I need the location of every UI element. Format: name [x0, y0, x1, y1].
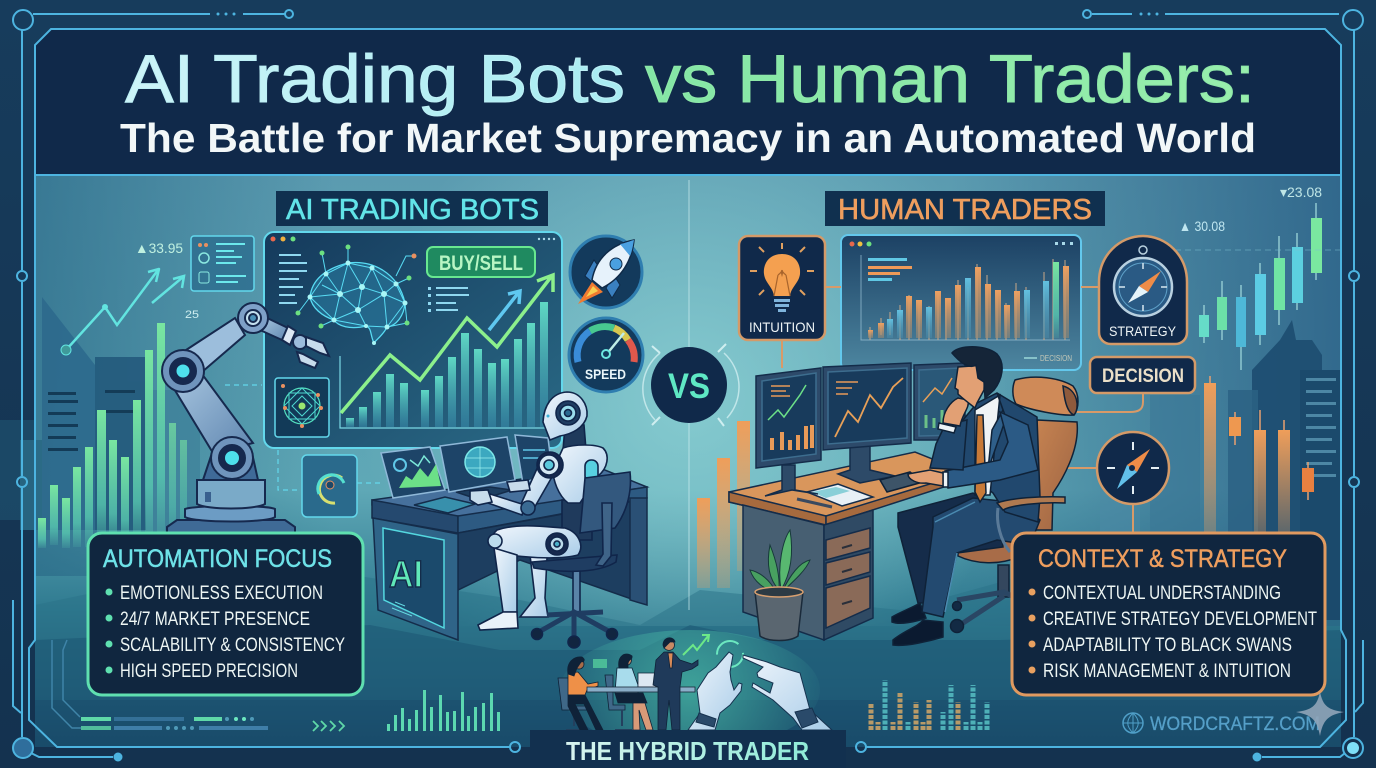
orange bars center-right [697, 421, 750, 588]
head [543, 392, 587, 440]
decision box [1090, 357, 1195, 393]
front shoe [893, 620, 943, 645]
people at table [558, 638, 698, 730]
forearm on desk [945, 412, 1038, 488]
heading: the hybrid trader [530, 730, 846, 768]
human monitors [756, 363, 965, 496]
back leg [898, 493, 1003, 603]
blue arrow [489, 291, 520, 330]
connector lines right [782, 287, 1143, 532]
icon panel below monitor [225, 385, 382, 517]
bullet list [106, 583, 345, 682]
robot arm [162, 303, 329, 546]
torso and neck [563, 425, 586, 450]
torso [963, 393, 1040, 522]
bar chart: left background [38, 323, 187, 548]
city skyline right [1100, 320, 1341, 620]
icon: strategy compass [1099, 236, 1187, 344]
panel title: AUTOMATION FOCUS [103, 545, 332, 573]
price label 33.95: ▲33.95 [135, 240, 183, 256]
bullet list: 24/7 MARKET PRESENCE [120, 609, 310, 630]
desk drawers [826, 528, 870, 628]
keyboard [880, 472, 923, 492]
mini bar chart: bottom left [387, 690, 500, 731]
human trader [880, 347, 1078, 645]
AI desk panel: AI [389, 554, 423, 596]
robot chair [532, 570, 618, 648]
green trend arrow [341, 275, 553, 413]
price label 30.08: ▲ 30.08 [1179, 218, 1225, 234]
heading: the hybrid trader: THE HYBRID TRADER [566, 736, 809, 766]
icon: speed gauge [569, 318, 643, 392]
title line two: The Battle for Market Supremacy in an Automated World [120, 115, 1256, 161]
small trend arrow [683, 635, 709, 655]
target pulse [717, 641, 743, 667]
bullet list: RISK MANAGEMENT & INTUITION [1043, 661, 1291, 682]
scene background [35, 176, 1341, 747]
icon: rocket [570, 236, 642, 308]
panel title: CONTEXT & STRATEGY [1038, 545, 1287, 573]
bullet list: SCALABILITY & CONSISTENCY [120, 635, 345, 656]
decorative data strips bottom left [52, 640, 344, 731]
mini dot chart: bottom right [871, 680, 987, 730]
BUY/SELL button [427, 247, 535, 277]
candlestick chart: right background [1175, 203, 1341, 543]
panel: context and strategy [1012, 533, 1325, 695]
thigh [492, 526, 581, 558]
far leg [520, 555, 548, 617]
watermark [1123, 692, 1344, 736]
front leg [922, 498, 1040, 617]
near lower leg [494, 548, 517, 612]
panel candles [868, 259, 1069, 340]
bullet list: EMOTIONLESS EXECUTION [120, 583, 323, 604]
bullet list: ADAPTABILITY TO BLACK SWANS [1043, 635, 1292, 656]
bullet list [1028, 583, 1317, 682]
title line one part one: AI Trading Bots [125, 41, 625, 117]
hand on chin [943, 398, 968, 426]
holo screen [593, 659, 607, 668]
robot desk [372, 468, 647, 640]
price label 25: 25 [185, 309, 199, 321]
head [955, 365, 985, 408]
forearm and hand [488, 494, 525, 515]
hand on keyboard [908, 470, 943, 486]
VS badge: VS [668, 367, 710, 406]
hybrid illustration [558, 630, 832, 750]
human desk [729, 452, 975, 640]
line chart arrows left [61, 269, 184, 355]
human chart panel [841, 235, 1081, 370]
plant [750, 530, 810, 640]
brain network icon [296, 244, 416, 345]
icon: intuition lightbulb [739, 236, 825, 340]
VS badge [643, 344, 739, 426]
bullet list: HIGH SPEED PRECISION [120, 661, 298, 682]
icon: strategy compass: STRATEGY [1109, 323, 1177, 339]
heading: human traders: HUMAN TRADERS [838, 194, 1092, 226]
human chart panel: DECISION [1040, 354, 1072, 363]
AI desk panel [383, 528, 444, 628]
office chair [950, 377, 1078, 632]
tablet [807, 484, 873, 506]
BUY/SELL button: BUY/SELL [439, 252, 523, 275]
robot hands [688, 652, 832, 730]
icon: speed gauge: SPEED [585, 366, 626, 382]
main AI monitor [264, 232, 562, 448]
small data panel [191, 236, 254, 291]
panel: automation focus [88, 533, 363, 695]
decision box: DECISION [1102, 366, 1184, 387]
watermark: WORDCRAFTZ.COM [1150, 714, 1320, 735]
monitor bar chart [346, 302, 548, 427]
keyboard [414, 497, 475, 513]
price label 23.08: ▾23.08 [1280, 184, 1322, 200]
robot monitors [381, 435, 552, 498]
bullet list: CONTEXTUAL UNDERSTANDING [1043, 583, 1281, 604]
armrest [997, 497, 1065, 510]
icon: compass [1097, 432, 1169, 504]
title banner [35, 29, 1341, 175]
city skyline left [0, 297, 200, 530]
robot trader [470, 392, 630, 648]
icon: intuition lightbulb: INTUITION [749, 319, 815, 335]
back shoe [892, 603, 926, 623]
network panel [275, 378, 329, 437]
raised arm [930, 420, 967, 470]
robot chair back and seat [580, 472, 630, 533]
upper arm [521, 462, 556, 510]
title line one part two: vs Human Traders: [645, 41, 1255, 117]
heading: AI trading bots: AI TRADING BOTS [286, 194, 539, 226]
